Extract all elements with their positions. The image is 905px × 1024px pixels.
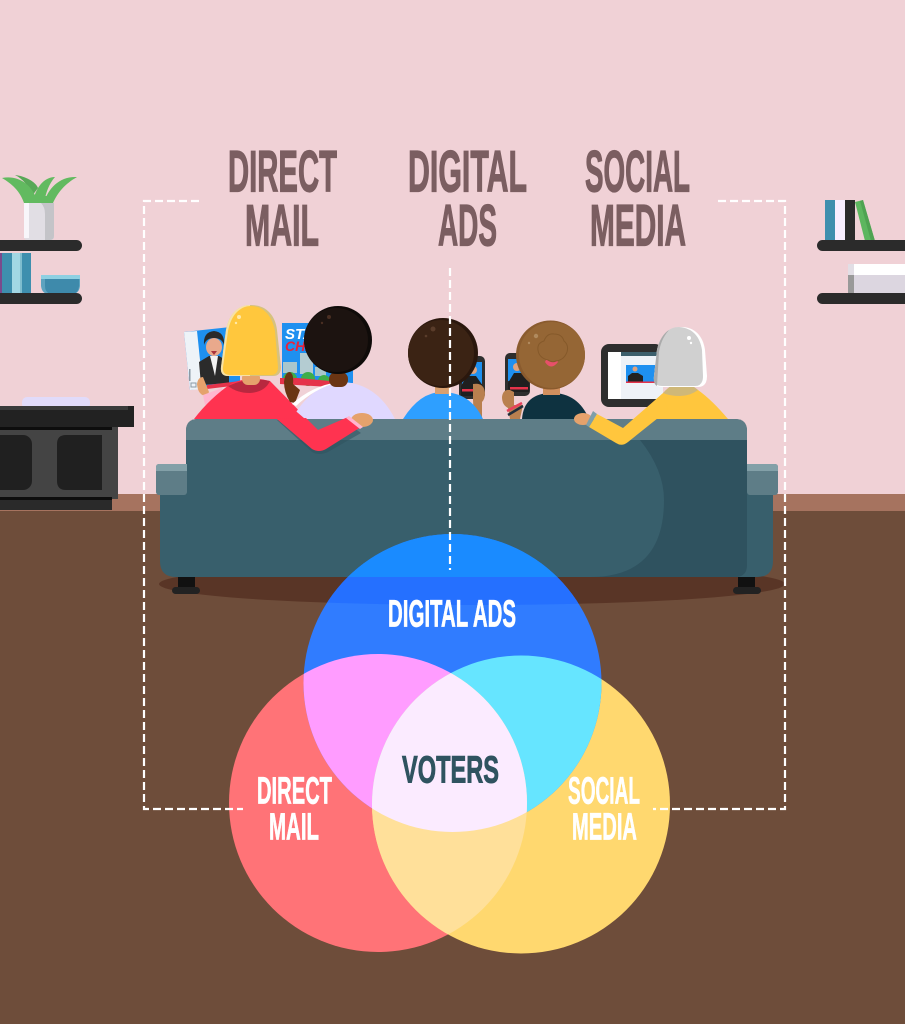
lower right shelf [817,293,905,304]
person: dark afro with flyer [280,306,395,419]
phone [459,356,485,399]
person: blonde reader with magazine [184,305,361,451]
hand and bracelets [502,390,523,419]
dark brown hair [408,318,478,388]
upper left shelf [0,240,82,251]
heading: direct mail [228,140,337,258]
heading: digital ads [408,140,527,258]
venn label: social media [568,770,640,848]
left sleeve cuff [203,388,224,405]
sofa shadow [159,563,785,605]
white box [848,264,905,293]
venn label: digital ads: DIGITAL ADS [388,594,516,636]
wall background [0,0,905,494]
venn label: direct mail: MAIL [269,806,319,848]
sofa back [186,419,747,577]
heading: digital ads: ADS [438,194,497,258]
venn label: social media: SOCIAL [568,770,640,812]
left shelves with plant, books and bowl [0,175,82,304]
magazine: candidate photo [184,326,240,396]
trees [283,372,330,387]
collar [663,383,698,396]
dashed frame left [144,201,243,809]
torso: blue shirt [403,392,483,419]
overlap: direct mail and digital ads [304,654,450,808]
dashed frame right [653,201,785,809]
heading: social media [585,140,690,258]
baseboard [0,494,905,511]
venn label: voters: VOTERS [402,750,499,792]
sofa legs [172,575,761,594]
sofa front lighter cushion [186,440,664,577]
right books [825,200,875,241]
dashed centre line [449,268,451,570]
heading: digital ads: DIGITAL [408,140,527,204]
venn label: direct mail [257,770,332,848]
overlap: voters centre [372,673,527,832]
lower left shelf [0,293,82,304]
hand holding flyer [284,372,300,403]
icon: potted plant [2,175,77,240]
heading: social media: MEDIA [590,194,686,258]
venn label: social media: MEDIA [572,806,637,848]
left books [0,253,31,294]
flyer: campaign mailer: STAN [285,326,326,343]
hair with bun [516,320,585,390]
icon: bowl [41,275,80,294]
torso: red sweater [194,379,361,451]
grey hair [654,327,707,387]
left armrest [156,464,187,495]
flyer: campaign mailer [280,323,353,387]
social media circle [372,656,670,954]
afro hair [304,306,372,374]
direct mail circle [229,654,527,952]
heading: direct mail: MAIL [245,194,319,258]
arm: red sweater draped over sofa [277,395,373,454]
venn label: direct mail: DIRECT [257,770,332,812]
heading: direct mail: DIRECT [228,140,337,204]
sofa top band [186,419,747,440]
venn diagram [229,534,670,954]
upper right shelf [817,240,905,251]
floor [0,511,905,1024]
sofa [156,419,778,594]
right shelves with books and box [817,200,905,304]
side table [0,397,134,510]
hand [473,384,485,419]
flyer: campaign mailer: CHAN [285,338,326,354]
phone [505,353,530,396]
tablet [601,344,663,407]
overlap: direct mail and social media [372,673,527,934]
arm: yellow sweater draped over sofa [574,394,668,445]
person: bun hair with phone [502,320,589,419]
blonde hair [221,305,281,376]
torso: yellow sweater [627,386,728,430]
right armrest [747,464,778,495]
torso: navy shirt [522,393,589,419]
sofa arm bases [160,490,200,577]
person: grey hair with tablet [601,327,728,430]
person: dark brown hair with phone [403,318,485,419]
torso: lavender shirt [292,382,395,419]
text: SOCIAL [585,140,690,204]
digital ads circle [304,534,602,812]
overlap: digital ads and social media [372,656,602,812]
